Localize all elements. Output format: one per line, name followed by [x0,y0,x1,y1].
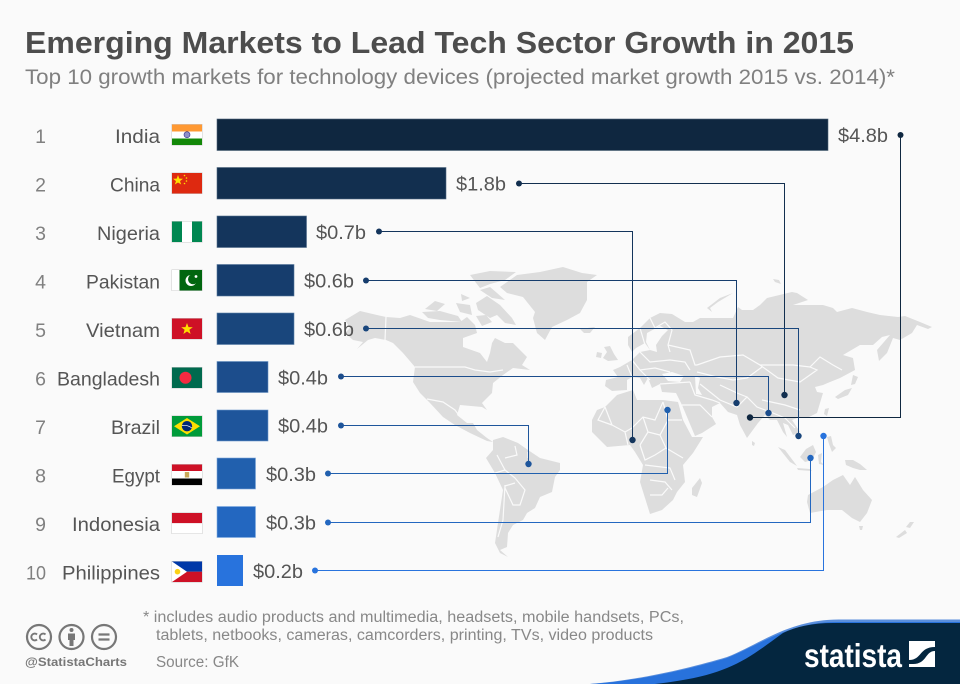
flag: China [172,172,202,194]
connector: Egypt [325,407,671,476]
footnote: * includes audio products and multimedia, headsets, mobile handsets, PCs, [143,609,684,626]
world map [345,267,932,557]
row 1: India: 1 [35,126,46,148]
handle: @StatistaCharts [25,655,127,669]
connector: India [747,132,904,421]
row 2: China: China [110,174,160,196]
flag: Egypt [172,464,202,486]
source: Source: GfK [156,654,240,671]
statista logo: statista [804,637,903,674]
row 5: Vietnam: $0.6b [304,319,354,341]
row 5: Vietnam [35,313,354,344]
row 8: Egypt: $0.3b [266,464,316,486]
row 2: China [35,168,506,199]
row 9: Indonesia: $0.3b [266,512,316,534]
connector: Vietnam [363,326,802,439]
row 8: Egypt: Egypt [112,466,161,488]
flag: Philippines [172,561,202,582]
row 9: Indonesia: Indonesia [72,514,160,536]
row 6: Bangladesh: 6 [35,368,46,390]
row 1: India: $4.8b [838,125,888,147]
row 10: Philippines: 10 [26,562,46,584]
row 9: Indonesia: 9 [35,514,46,536]
row 7: Brazil: $0.4b [278,416,328,438]
row 4: Pakistan: Pakistan [86,272,160,294]
row 3: Nigeria: $0.7b [316,222,366,244]
row 3: Nigeria: Nigeria [97,223,160,245]
row 4: Pakistan: 4 [35,272,46,294]
connector: Bangladesh [338,374,772,416]
footer swoosh [590,619,960,684]
connector: China [516,180,788,398]
footnote: tablets, netbooks, cameras, camcorders, printing, TVs, video products [156,627,653,644]
row 9: Indonesia [35,506,316,538]
row 10: Philippines: $0.2b [253,561,303,583]
connector: Philippines [312,433,827,574]
row 8: Egypt [35,458,316,489]
row 4: Pakistan [35,264,354,296]
row 10: Philippines [26,555,303,586]
row 5: Vietnam: 5 [35,320,46,342]
connector: Pakistan [363,278,740,406]
row 5: Vietnam: Vietnam [86,320,160,342]
icon: creative commons licence [27,625,116,649]
row 6: Bangladesh [35,362,328,392]
row 1: India [35,119,888,150]
flag: Indonesia [172,512,202,534]
row 1: India: India [115,126,160,148]
row 2: China: $1.8b [456,174,506,196]
row 2: China: 2 [35,174,46,196]
row 7: Brazil [35,410,328,441]
row 7: Brazil: Brazil [111,417,160,439]
row 3: Nigeria [35,216,366,248]
flag: Vietnam [172,318,202,340]
flag: Bangladesh [172,367,202,388]
flag: Nigeria [172,221,202,242]
icon: statista mark [909,641,935,667]
connector: Brazil [338,422,532,467]
row 6: Bangladesh: $0.4b [278,368,328,390]
flag: India [172,124,202,146]
row 3: Nigeria: 3 [35,223,46,245]
row 6: Bangladesh: Bangladesh [57,368,160,390]
connector: Indonesia [325,455,814,526]
row 10: Philippines: Philippines [62,562,160,584]
connector lines [312,132,904,574]
row 4: Pakistan: $0.6b [304,270,354,292]
map inland seas and borders [385,317,842,537]
title: Emerging Markets to Lead Tech Sector Growth in 2015 [25,25,854,60]
row 7: Brazil: 7 [35,417,46,439]
flag: Pakistan [172,270,202,291]
row 8: Egypt: 8 [35,466,46,488]
footnote [143,609,684,644]
connector: Nigeria [376,228,636,443]
subtitle: Top 10 growth markets for technology devices (projected market growth 2015 vs. 2014)* [25,65,896,89]
flag: Brazil [172,416,202,437]
